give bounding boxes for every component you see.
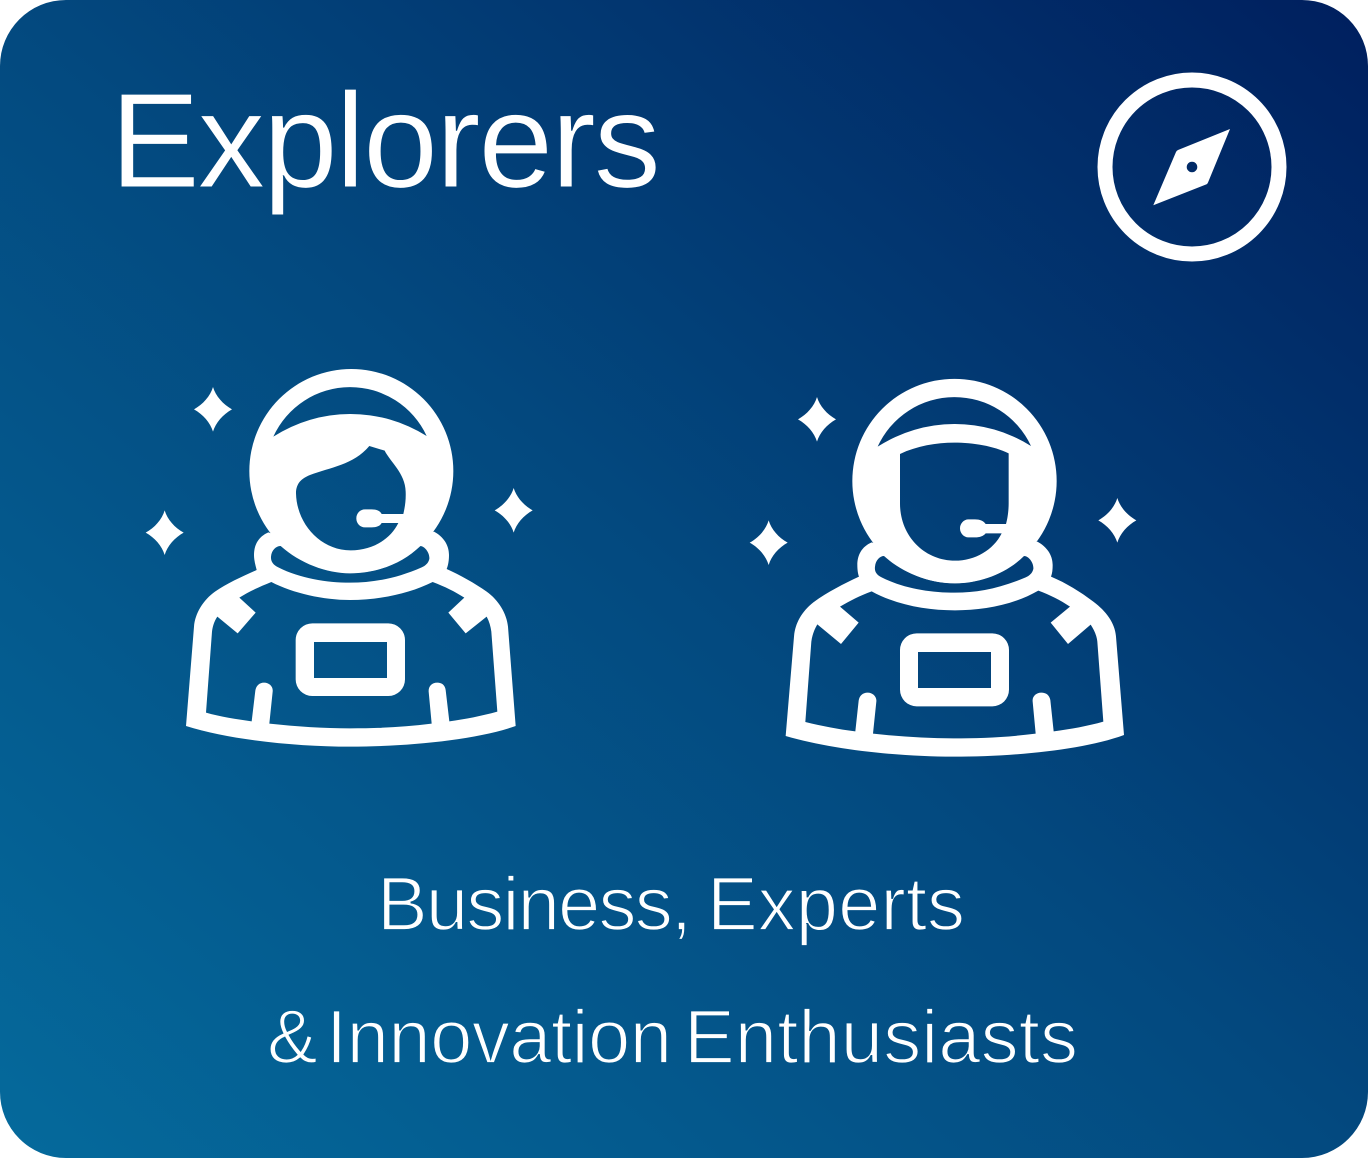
caption line 1: Business, <box>377 862 692 947</box>
astronaut suit and helmet <box>249 369 453 573</box>
icon: male astronaut with stars <box>750 379 1136 757</box>
sparkle stars <box>194 387 232 432</box>
astronaut suit and helmet <box>852 379 1057 583</box>
icon: female astronaut with stars <box>146 369 533 747</box>
caption line 2: & <box>267 995 318 1080</box>
chest panel <box>900 633 1009 706</box>
caption line 2: Enthusiasts <box>684 995 1078 1080</box>
title: Explorers: Explorers <box>110 65 661 216</box>
chest panel <box>296 623 405 696</box>
icon: compass <box>1105 80 1279 254</box>
caption line 1: Experts <box>707 862 965 947</box>
caption line 2: Innovation <box>326 995 672 1080</box>
sparkle stars <box>798 397 836 442</box>
